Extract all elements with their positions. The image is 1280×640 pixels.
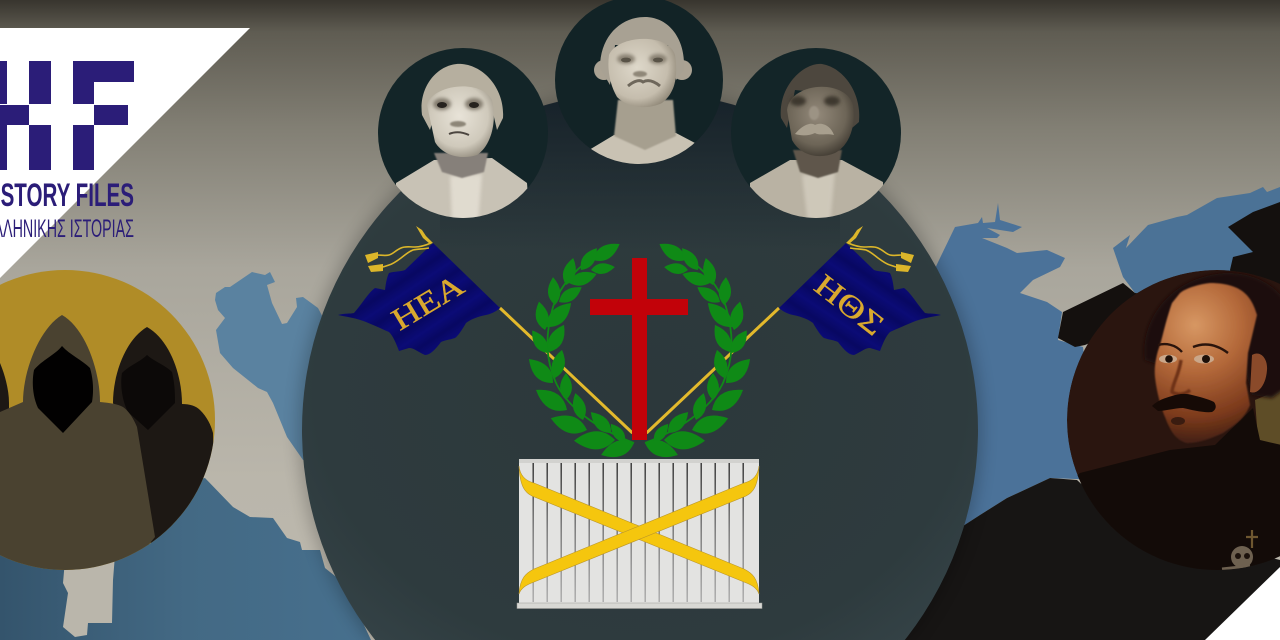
bust: centre — [555, 0, 723, 170]
flag right HTS — [646, 226, 941, 433]
logo triangle top left — [0, 28, 250, 278]
portrait coat — [1078, 408, 1280, 570]
portrait chin tuft — [1171, 417, 1185, 425]
portrait brows and eyes — [1158, 344, 1228, 394]
bust: right — [731, 48, 901, 225]
map: left upper peninsula — [215, 272, 340, 470]
portrait face — [1155, 283, 1257, 443]
map: sea and land — [0, 187, 1280, 640]
flag left inscription: ΗΕΑ — [385, 267, 471, 337]
map: upper right sea — [1113, 187, 1280, 300]
fence base — [517, 603, 762, 608]
logo — [0, 61, 134, 243]
yellow band ascending — [519, 466, 759, 594]
map: bottom left sea — [0, 478, 371, 640]
panel: central disc — [298, 88, 982, 640]
red cross — [590, 258, 688, 440]
portrait skull badge — [1222, 530, 1258, 569]
wreath left branch — [524, 238, 637, 462]
white triangle bottom right — [1205, 567, 1280, 640]
yellow band descending — [519, 466, 759, 594]
bust: left — [378, 48, 548, 225]
map: right peninsula sea — [920, 203, 1100, 530]
map: bottom left land — [63, 555, 115, 637]
flag left HEA — [338, 226, 632, 433]
wreath right branch — [642, 238, 755, 462]
portrait hair — [1144, 273, 1280, 398]
flag right inscription: ΗΘΣ — [808, 267, 891, 343]
fence body — [519, 463, 759, 603]
portrait background olive — [1255, 390, 1280, 444]
centre hooded figure — [0, 315, 155, 580]
portrait ear — [1250, 353, 1267, 393]
map: lower right dark land — [900, 478, 1280, 640]
map: upper right dark land — [1058, 202, 1280, 347]
portrait: left hooded figures — [0, 270, 215, 580]
wreath — [524, 238, 755, 462]
portrait: right moustached man — [1060, 270, 1280, 580]
fence with crossed bands — [517, 459, 762, 608]
logo mark HF — [0, 61, 134, 170]
fence bars — [532, 461, 744, 602]
portrait moustache — [1152, 394, 1216, 412]
far left figure — [0, 363, 9, 412]
fence top rail — [519, 459, 759, 463]
right hooded figure — [113, 327, 215, 560]
